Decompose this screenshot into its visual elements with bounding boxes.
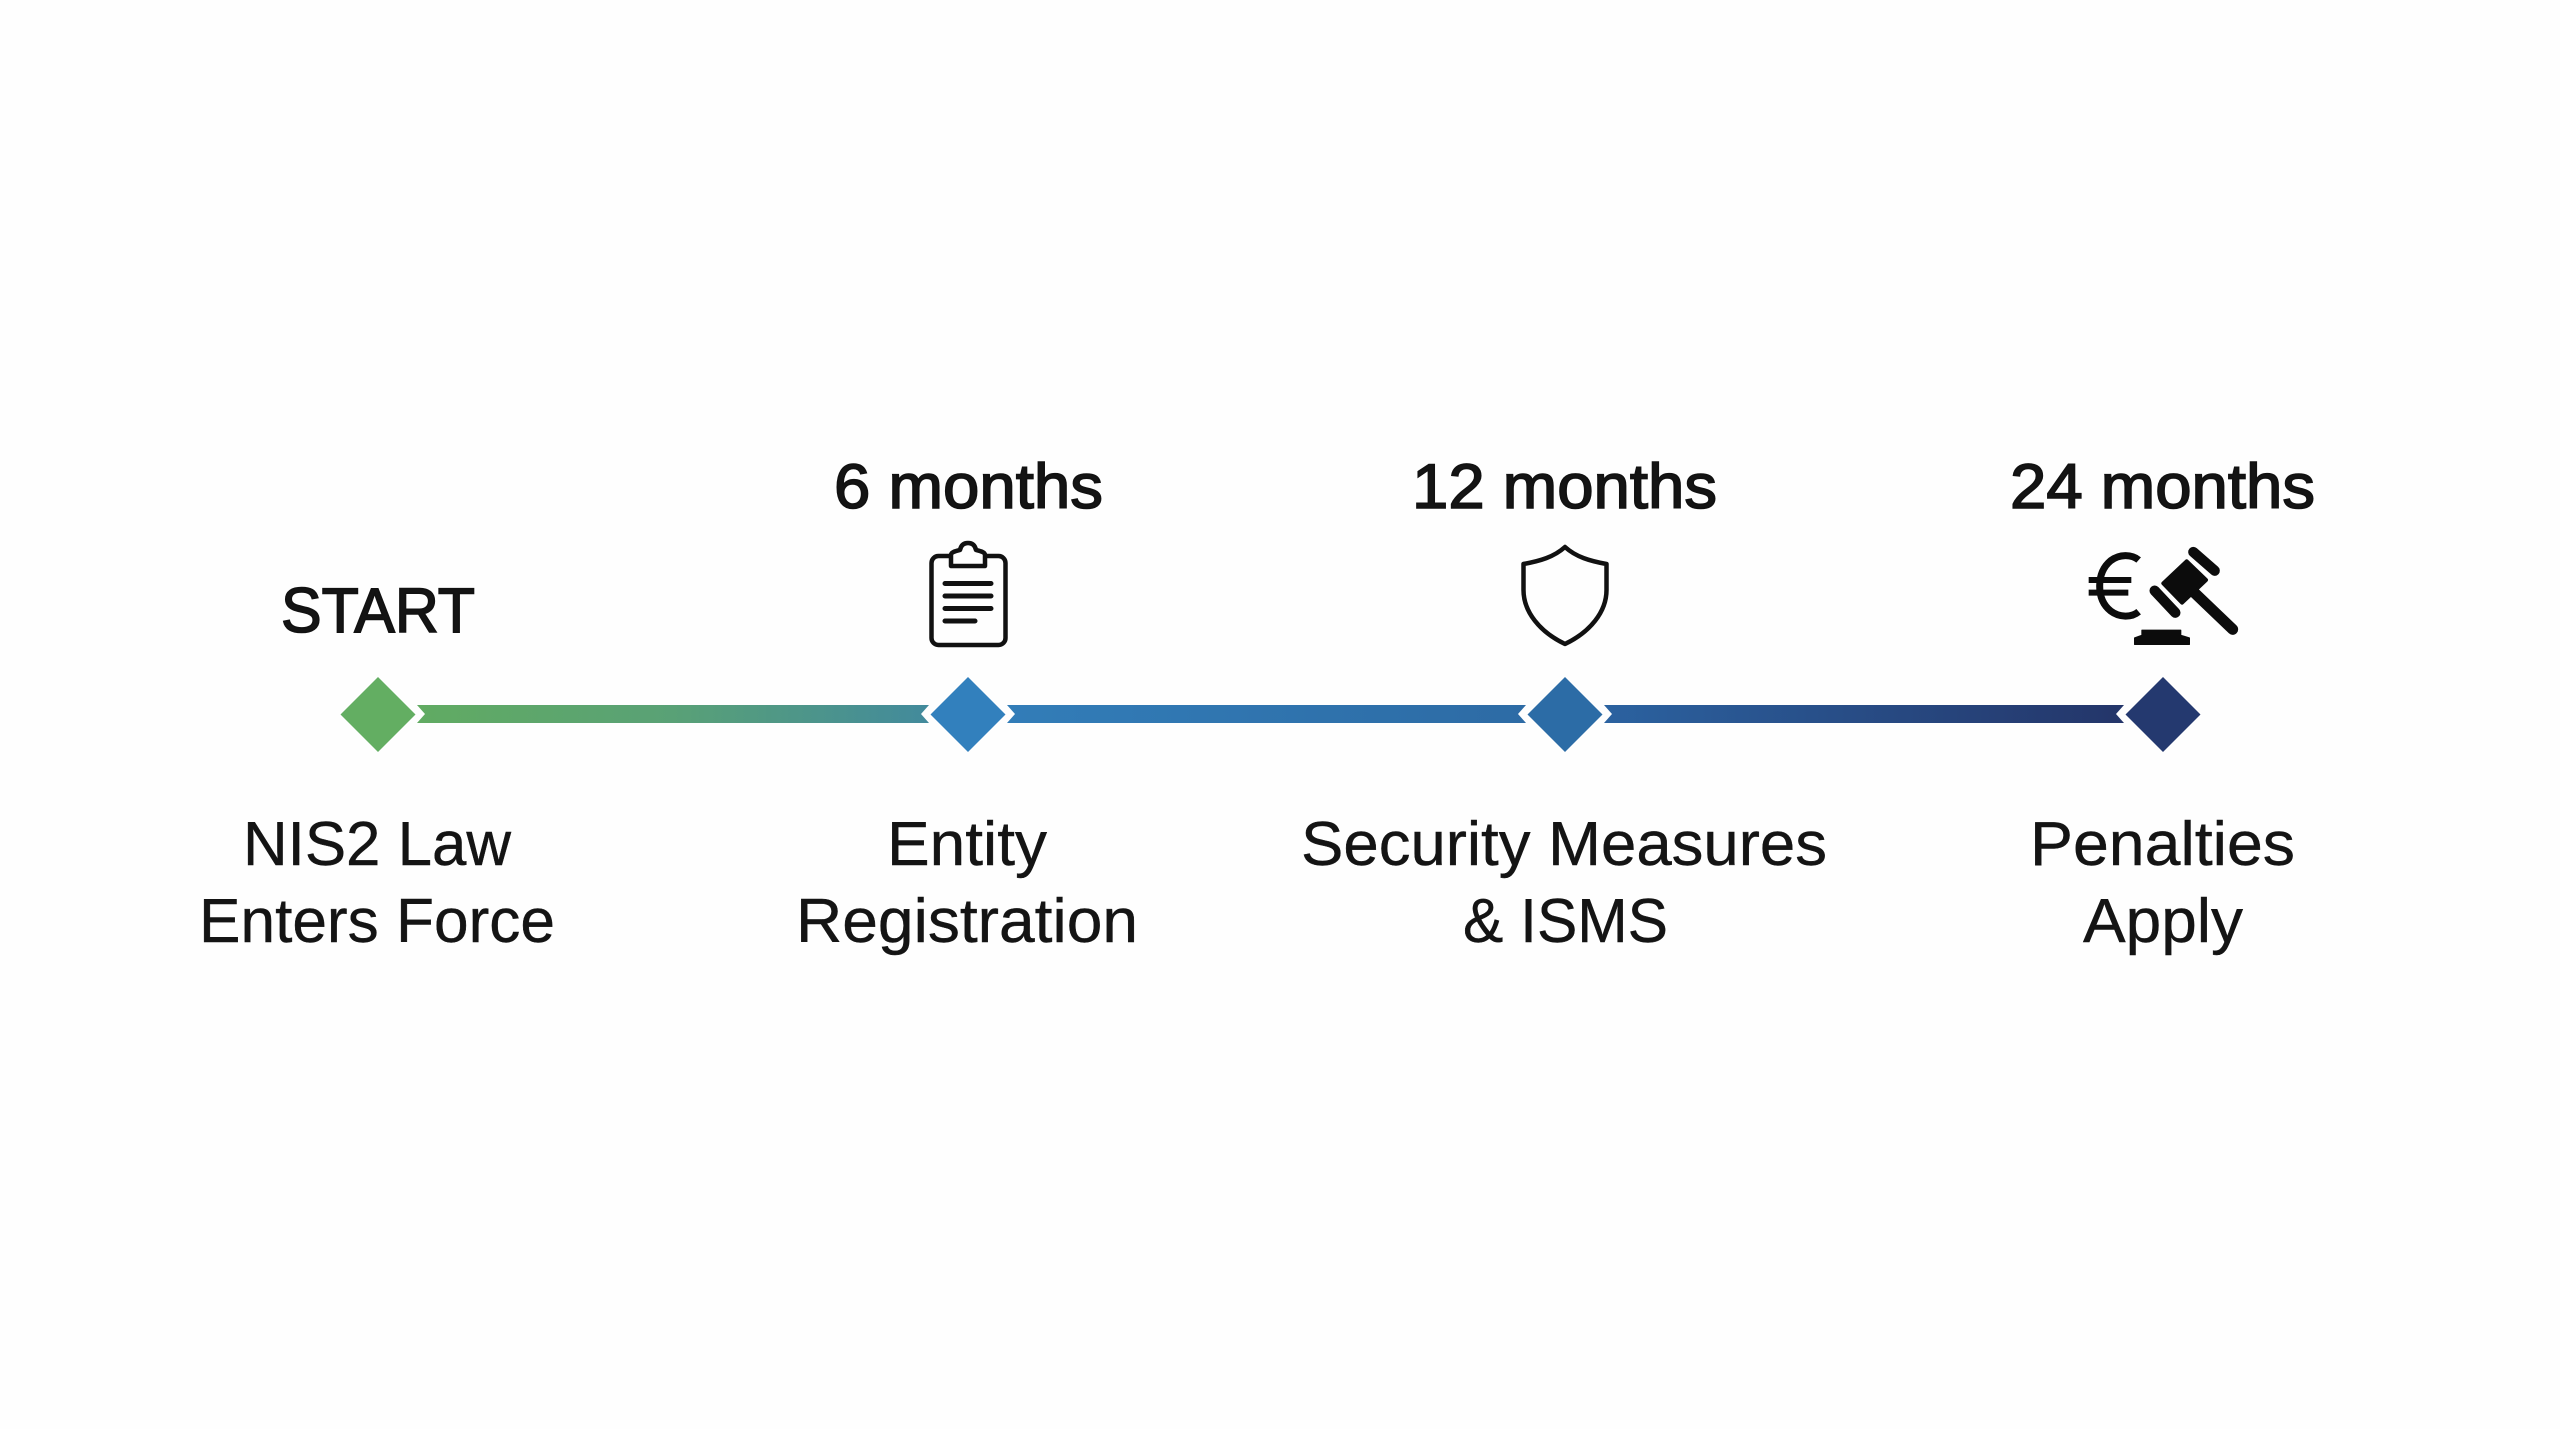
label: Penalties Apply: Penalties: [2030, 810, 2295, 879]
label: Penalties Apply: [2030, 810, 2295, 956]
heading: 12 months: 12 months: [1412, 452, 1717, 522]
label: Entity Registration: Registration: [796, 887, 1138, 956]
euro sign: [2089, 556, 2139, 616]
milestone diamond: start: [340, 677, 416, 752]
label: Security Measures & ISMS: & ISMS: [1463, 887, 1668, 956]
milestone diamond: 12 months: [1528, 677, 1602, 752]
heading: START: START: [281, 576, 475, 646]
timeline segment: 12 to 24 months: [1604, 705, 2124, 723]
timeline segment: 6 to 12 months: [1007, 705, 1526, 723]
milestone diamond: 24 months: [2126, 677, 2200, 752]
timeline segment: start to 6 months: [417, 705, 929, 723]
label: Security Measures & ISMS: [1301, 810, 1827, 956]
icon: shield: [1524, 547, 1606, 644]
label: Entity Registration: [796, 810, 1138, 956]
heading: 24 months: 24 months: [2010, 452, 2315, 522]
label: NIS2 Law Enters Force: NIS2 Law: [243, 810, 511, 879]
icon: clipboard: [932, 543, 1006, 645]
label: NIS2 Law Enters Force: Enters Force: [199, 887, 555, 956]
milestone diamond: 6 months: [930, 677, 1006, 752]
label: Penalties Apply: Apply: [2083, 887, 2243, 956]
timeline: [340, 677, 2200, 752]
icon: euro and gavel: [2089, 552, 2233, 644]
label: NIS2 Law Enters Force: [199, 810, 555, 956]
label: Entity Registration: Entity: [887, 810, 1047, 879]
heading: 6 months: 6 months: [834, 452, 1103, 522]
label: Security Measures & ISMS: Security Measures: [1301, 810, 1827, 879]
gavel: [2135, 552, 2233, 644]
